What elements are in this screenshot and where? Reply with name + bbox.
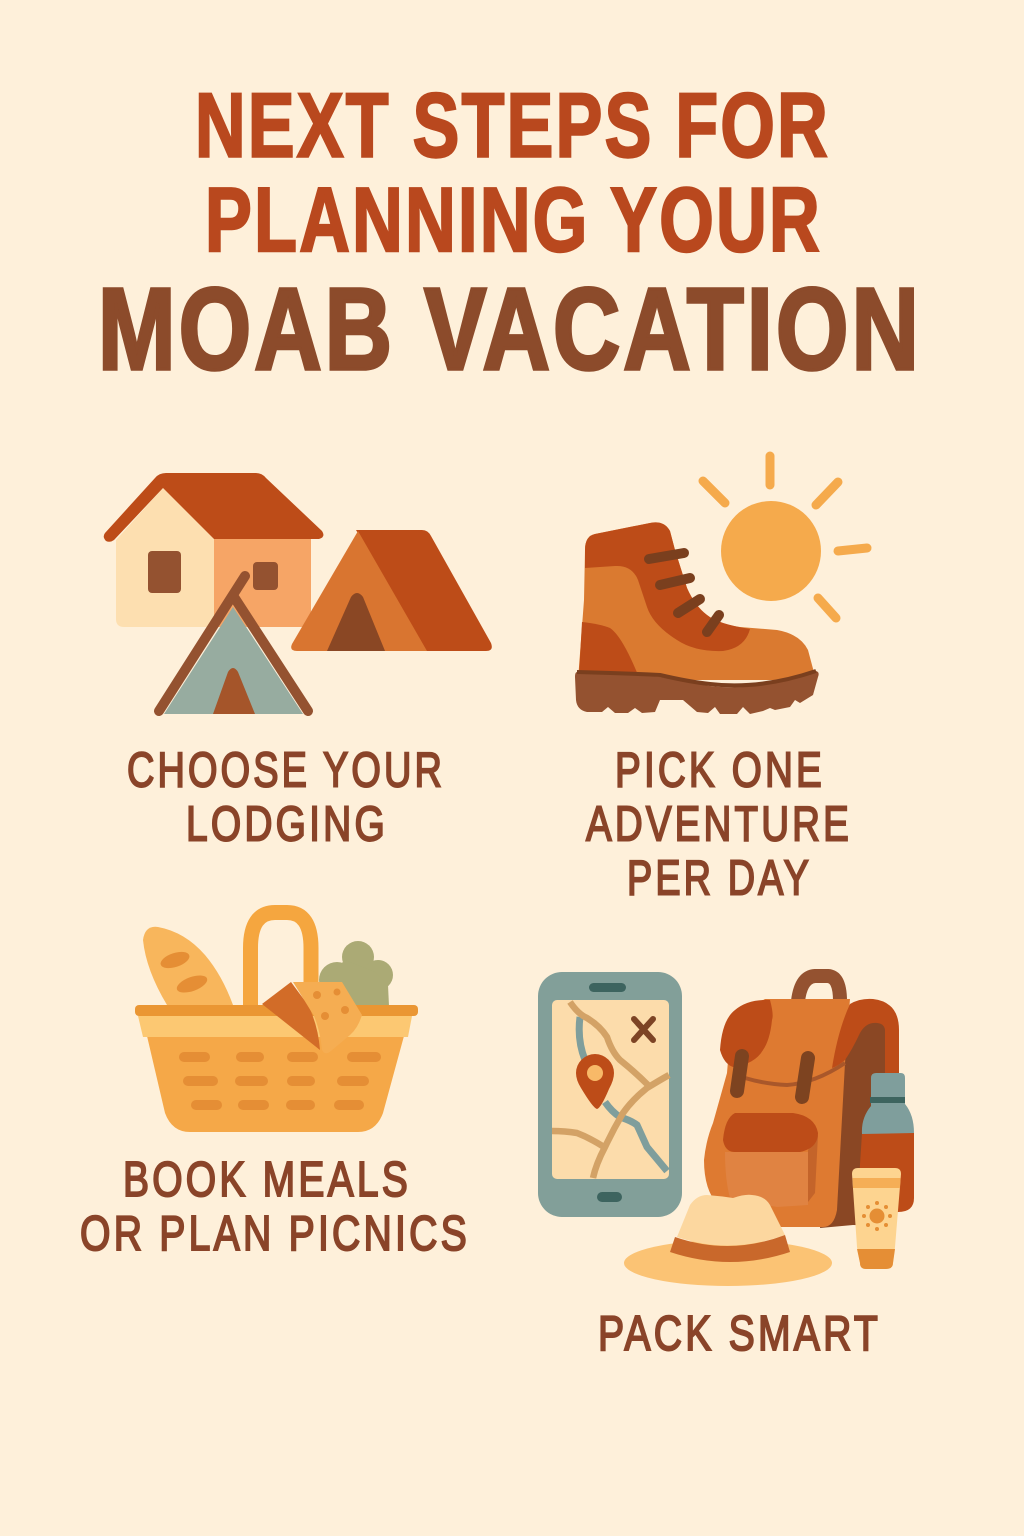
label: choose your lodging: LODGING	[186, 798, 388, 852]
title: NEXT STEPS FOR	[195, 76, 830, 176]
icon: picnic basket	[135, 912, 418, 1132]
label: book meals or plan picnics	[80, 1153, 470, 1261]
icon: phone with map	[538, 972, 682, 1217]
label: book meals or plan picnics: OR PLAN PICNICS	[80, 1207, 470, 1261]
icon: water bottle	[857, 1073, 914, 1212]
icon: lodging with house and tents	[104, 473, 492, 714]
label: pick one adventure per day: PICK ONE	[615, 744, 825, 798]
label: pick one adventure per day	[586, 744, 852, 906]
icon: hiking boot and sun	[575, 456, 867, 714]
label: book meals or plan picnics: BOOK MEALS	[123, 1153, 411, 1207]
label: pick one adventure per day: ADVENTURE	[586, 798, 852, 852]
icon: sun hat	[624, 1195, 832, 1286]
title: PLANNING YOUR	[205, 170, 822, 271]
label: choose your lodging: CHOOSE YOUR	[127, 744, 445, 798]
label: choose your lodging	[127, 744, 445, 852]
icon: backpack	[704, 976, 899, 1228]
title	[98, 76, 922, 394]
label: pack smart: PACK SMART	[598, 1307, 881, 1361]
icon: sunscreen tube	[852, 1168, 901, 1269]
label: pick one adventure per day: PER DAY	[627, 852, 812, 906]
